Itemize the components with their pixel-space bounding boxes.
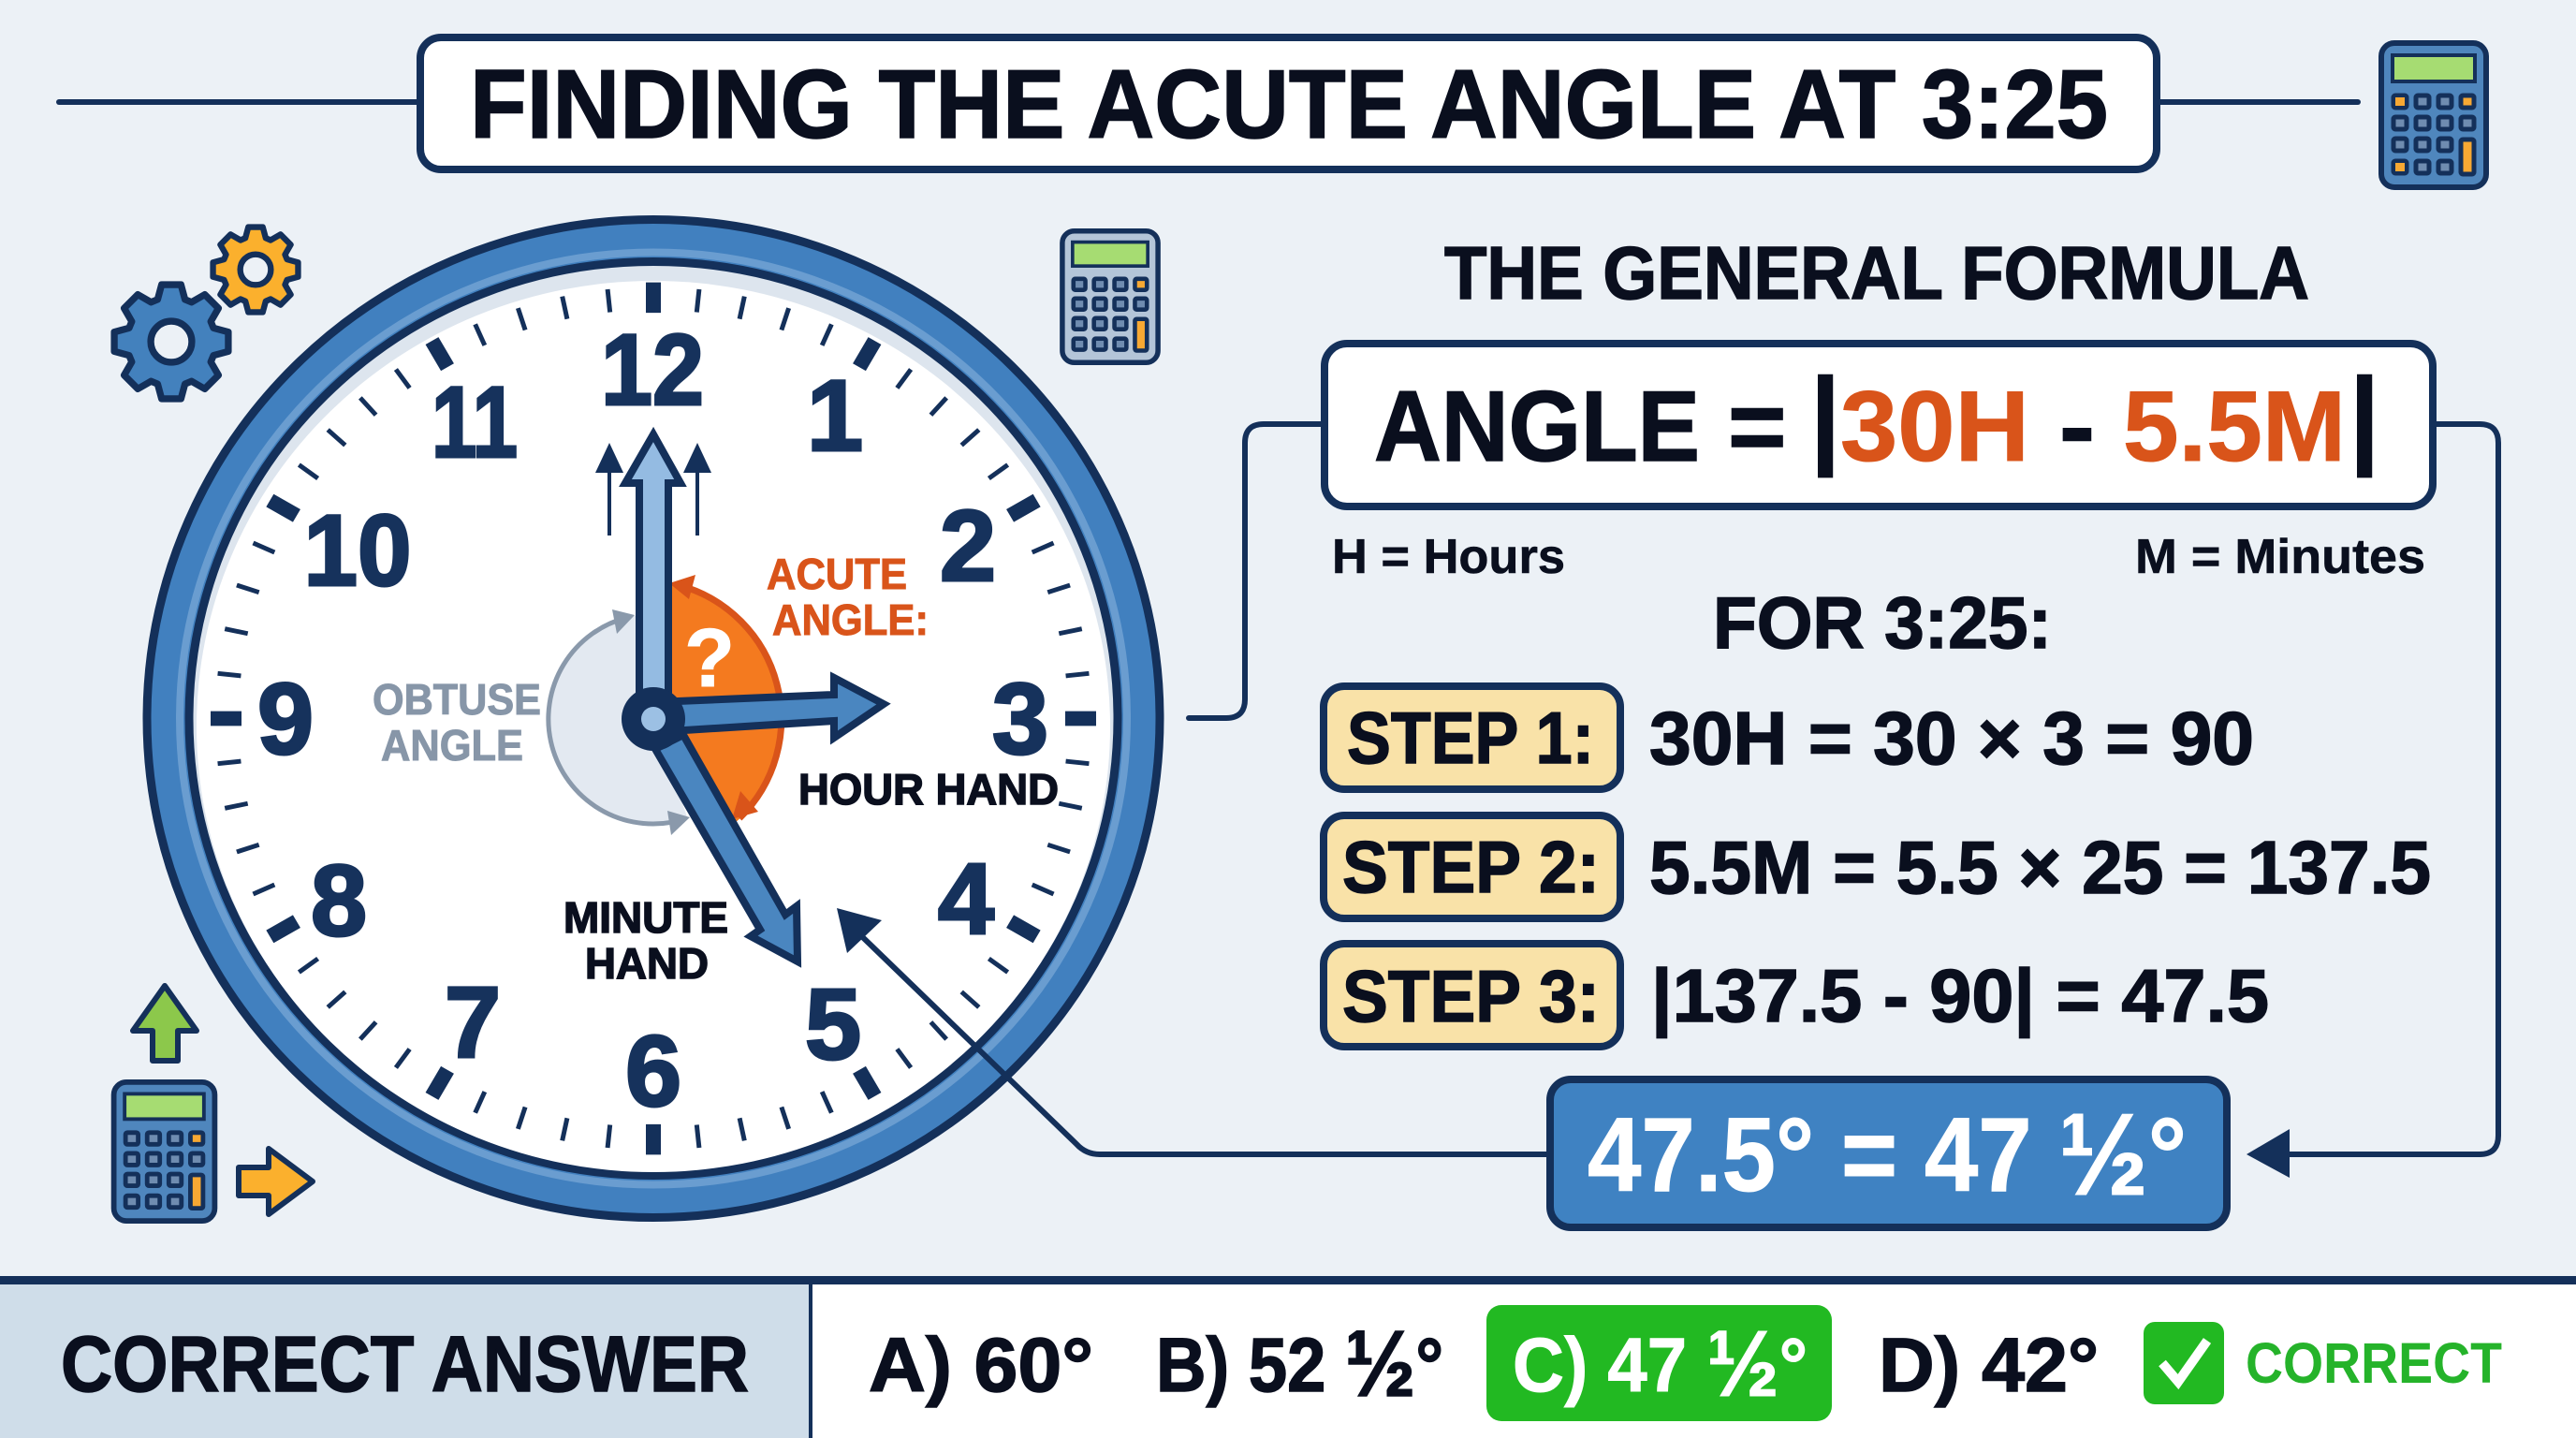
clock numerals: 12 — [601, 313, 704, 426]
icon: calculator bottom left — [114, 1082, 214, 1221]
formula box: | — [1810, 357, 1840, 477]
formula box: 30H — [1840, 370, 2029, 482]
option c highlighted — [1486, 1305, 1832, 1421]
option a: A) 60° — [869, 1323, 1093, 1408]
answer box: 47.5° = 47 — [1588, 1096, 2070, 1213]
hour ticks — [211, 283, 1096, 1154]
step 2 — [1324, 815, 2431, 918]
icon: calculator top right — [2381, 43, 2486, 187]
step 2: 5.5M = 5.5 × 25 = 137.5 — [1649, 826, 2431, 909]
clock numerals: 1 — [807, 359, 863, 472]
heading: the general formula: THE GENERAL FORMULA — [1444, 231, 2309, 315]
clock numerals: 9 — [257, 662, 314, 775]
clock numerals — [257, 313, 1048, 1127]
minute hand — [655, 735, 798, 961]
clock numerals: 10 — [303, 493, 412, 607]
option c highlighted: ½ — [1706, 1312, 1779, 1416]
label: acute angle: ANGLE: — [772, 595, 929, 644]
step 2: STEP 2: — [1342, 826, 1600, 908]
label: obtuse angle: ANGLE — [381, 721, 523, 770]
step 3 — [1324, 944, 2269, 1047]
clock — [147, 219, 1160, 1217]
arrow: clock to formula — [1189, 424, 1323, 718]
vertical hand — [625, 434, 681, 726]
label: obtuse angle: OBTUSE — [373, 675, 541, 724]
option b: ½ — [1345, 1312, 1415, 1416]
legend: hours: H = Hours — [1332, 530, 1565, 584]
minute ticks — [218, 289, 1089, 1148]
option b: ° — [1415, 1323, 1443, 1408]
clock numerals: 5 — [805, 967, 861, 1080]
step 1 — [1324, 686, 2254, 789]
correct answer label panel — [0, 1281, 810, 1438]
option b: B) 52 — [1156, 1323, 1344, 1408]
icon: gears — [114, 227, 298, 399]
arrow: answer to clock — [837, 908, 1550, 1154]
option c highlighted: ° — [1779, 1323, 1808, 1408]
clock hub — [622, 687, 685, 751]
step 3: |137.5 - 90| = 47.5 — [1651, 954, 2269, 1038]
clock numerals: 6 — [625, 1014, 681, 1127]
clock numerals: 11 — [432, 365, 518, 478]
clock numerals: 7 — [445, 965, 501, 1078]
bottom answer bar — [0, 1276, 2576, 1438]
label: minute hand — [564, 893, 728, 988]
label: obtuse angle — [373, 675, 541, 770]
option c highlighted: C) 47 — [1513, 1323, 1701, 1408]
formula box: ANGLE — [1374, 370, 1700, 482]
step 1: STEP 1: — [1347, 697, 1594, 779]
label: hour hand: HOUR HAND — [798, 765, 1059, 814]
formula box — [1325, 344, 2433, 506]
option d: D) 42° — [1879, 1323, 2099, 1408]
answer box — [1550, 1079, 2227, 1227]
formula box: | — [2349, 357, 2379, 477]
correct label: CORRECT — [2246, 1331, 2502, 1395]
obtuse angle arc — [549, 609, 690, 835]
icon: check mark — [2144, 1322, 2224, 1404]
arrow: formula to answer — [2247, 424, 2498, 1178]
icon: calculator mid — [1062, 231, 1158, 362]
label: minute hand: HAND — [585, 939, 709, 988]
label: acute angle — [767, 550, 929, 644]
correct answer label panel: CORRECT ANSWER — [61, 1320, 749, 1408]
legend: minutes: M = Minutes — [2135, 530, 2425, 584]
acute angle wedge — [653, 575, 783, 824]
step 1: 30H = 30 × 3 = 90 — [1649, 697, 2254, 780]
title banner — [59, 37, 2358, 169]
question mark: ? — [684, 611, 735, 704]
clock ring — [147, 219, 1160, 1217]
hour hand — [655, 678, 884, 738]
label: minute hand: MINUTE — [564, 893, 728, 942]
icon: green up arrow — [133, 986, 197, 1061]
formula box: = — [1728, 370, 1786, 482]
formula box: - — [2059, 370, 2095, 482]
clock numerals: 3 — [992, 662, 1048, 775]
clock numerals: 8 — [311, 844, 367, 957]
clock numerals: 2 — [940, 489, 996, 602]
heading: for 3:25: FOR 3:25: — [1713, 581, 2052, 664]
small up arrows — [595, 443, 711, 536]
step 3: STEP 3: — [1342, 955, 1600, 1037]
clock numerals: 4 — [938, 842, 994, 955]
icon: orange right arrow — [239, 1149, 313, 1214]
label: acute angle: ACUTE — [767, 550, 907, 598]
answer box: ½ — [2058, 1091, 2148, 1220]
answer box: ° — [2148, 1096, 2187, 1213]
title banner: FINDING THE ACUTE ANGLE AT 3:25 — [470, 51, 2108, 159]
formula box: 5.5M — [2123, 370, 2346, 482]
